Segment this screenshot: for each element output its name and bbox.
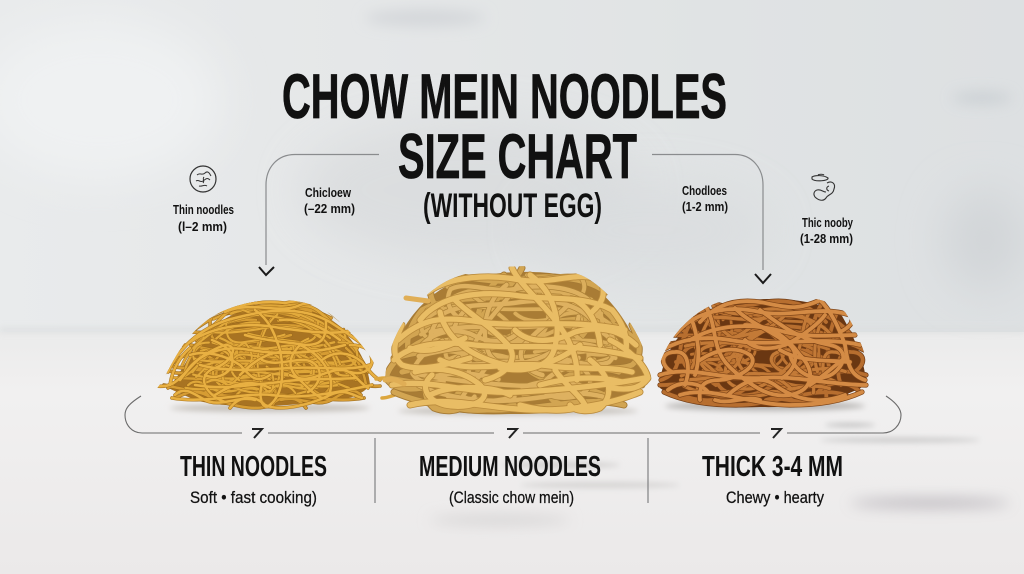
marble table — [0, 332, 1024, 574]
title: CHOW MEIN NOODLES — [282, 62, 727, 132]
icon: thin noodle circle — [190, 166, 216, 192]
label: right measurement — [682, 184, 728, 214]
label: thin noodles: Thin noodles — [173, 203, 234, 217]
label: thick noodles: Thic nooby — [802, 216, 853, 230]
title: SIZE CHART — [398, 122, 637, 192]
column: thin noodles: Soft • fast cooking) — [190, 489, 317, 507]
background wall — [0, 0, 1024, 334]
column: thick noodles: Chewy • hearty — [726, 489, 825, 507]
title — [282, 62, 727, 225]
bracket line with markers — [125, 396, 901, 438]
shadows under noodles — [170, 401, 865, 415]
noodles: thick mound — [660, 298, 866, 407]
column: medium noodles — [419, 451, 601, 507]
label: right measurement: (1-2 mm) — [682, 200, 728, 214]
label: thin noodles: (l–2 mm) — [178, 220, 227, 234]
label: left measurement — [304, 186, 355, 216]
label: right measurement: Chodloes — [682, 184, 727, 198]
column: thin noodles — [180, 451, 327, 507]
dividers — [375, 438, 648, 503]
title: (WITHOUT EGG) — [423, 187, 602, 225]
column: medium noodles: MEDIUM NOODLES — [419, 451, 601, 483]
noodles: medium mound — [385, 268, 648, 414]
column: thin noodles: THIN NOODLES — [180, 451, 327, 483]
label: thick noodles — [800, 216, 853, 246]
column: thick noodles — [702, 451, 843, 507]
icon: thick noodle — [812, 174, 835, 200]
label: left measurement: Chicloew — [305, 186, 351, 200]
column: thick noodles: THICK 3-4 MM — [702, 451, 843, 483]
noodles: thin mound — [156, 301, 402, 408]
column: medium noodles: (Classic chow mein) — [449, 489, 574, 507]
left arrow — [259, 154, 379, 275]
label: left measurement: (–22 mm) — [304, 202, 355, 216]
right arrow — [652, 154, 771, 283]
label: thin noodles — [173, 203, 234, 234]
label: thick noodles: (1-28 mm) — [800, 232, 853, 246]
